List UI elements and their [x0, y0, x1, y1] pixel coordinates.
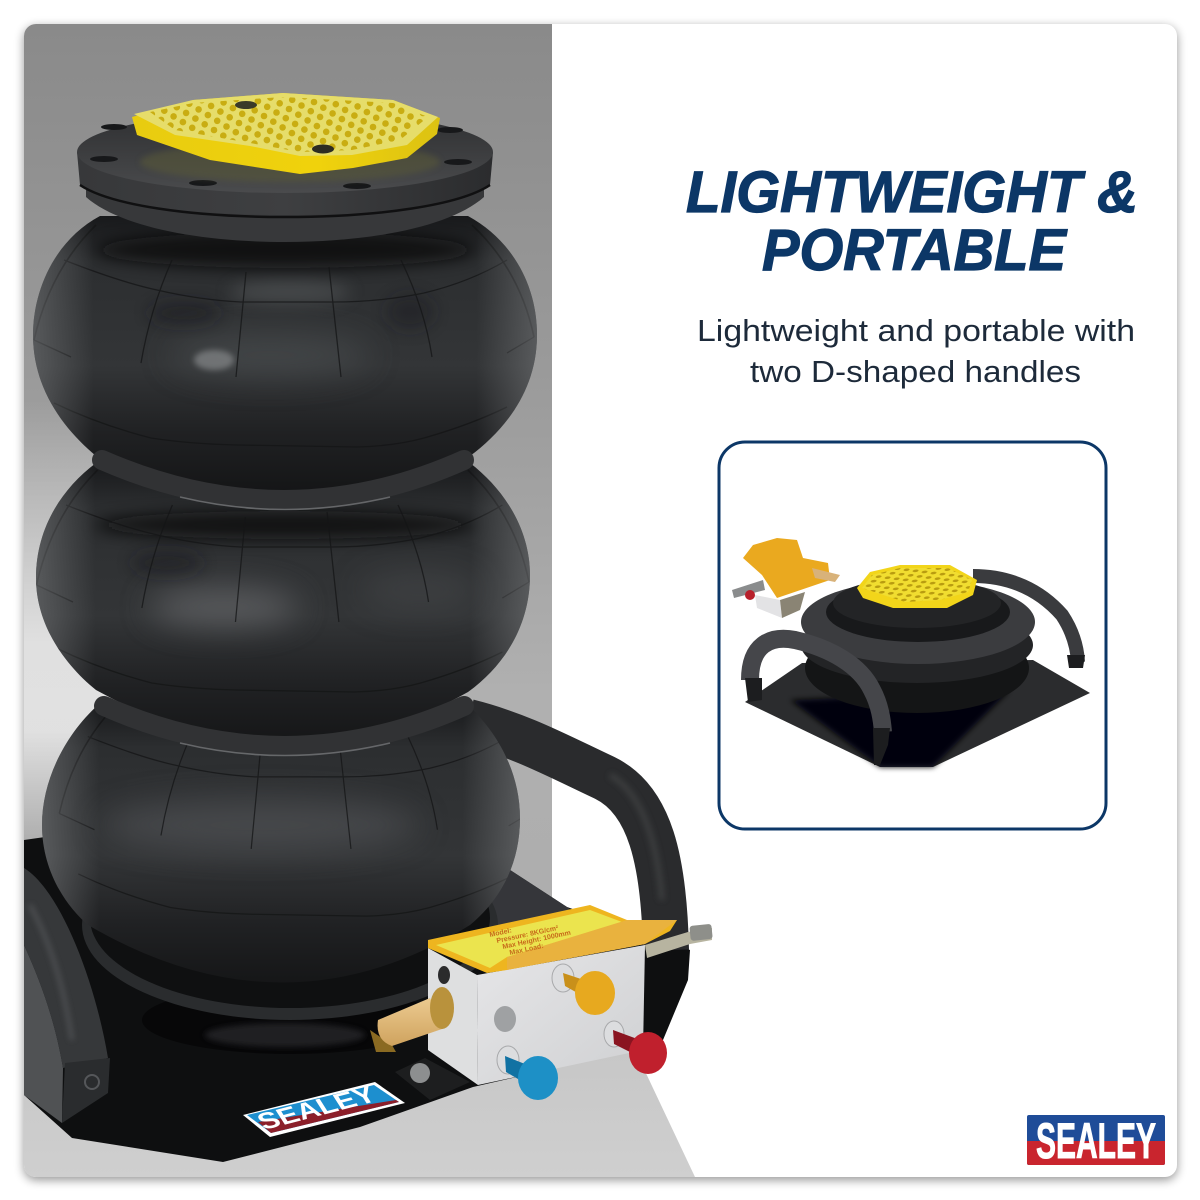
inset bellows: [801, 578, 1035, 713]
yellow pedal: [428, 905, 677, 973]
sealey sticker: [243, 1082, 405, 1137]
exhaust silencer: [370, 987, 454, 1052]
pad shadow: [142, 149, 438, 181]
left handle: [24, 868, 110, 1123]
gold knob: [552, 964, 615, 1015]
inset rear handle: [973, 576, 1078, 662]
yellow pedal: Pressure: 8KG/cm²: [496, 925, 560, 945]
inset photo panel: [719, 442, 1106, 829]
sealey logo: [1027, 1113, 1165, 1169]
yellow pedal: Max Load:: [509, 943, 544, 957]
heading: [686, 160, 1138, 283]
red knob: [604, 1021, 667, 1074]
description text: [697, 313, 1135, 389]
pedal label lines: Model:: [489, 927, 512, 939]
rear handle: [468, 722, 666, 950]
inset plate shade: [790, 690, 1010, 767]
pad studs: [150, 97, 425, 152]
bottom bellow: [42, 708, 520, 974]
foot valve: [370, 905, 713, 1100]
plate washer: [395, 1058, 470, 1100]
heading: PORTABLE: [762, 218, 1068, 283]
air connector: [645, 924, 713, 958]
top flange: [77, 111, 493, 242]
air jack product photo: [24, 39, 713, 1162]
middle bellow: [36, 465, 530, 736]
description text: two D-shaped handles: [750, 354, 1081, 389]
sticker wordmark: SEALEY: [252, 1082, 382, 1135]
plate far corner: [492, 870, 570, 925]
heading: LIGHTWEIGHT &: [686, 160, 1138, 225]
base plate: [24, 837, 690, 1162]
inset front handle: [750, 639, 883, 732]
screw: [494, 1006, 516, 1032]
grey photo backdrop: [24, 24, 695, 1177]
lower ring mount: [82, 903, 498, 1054]
lower waist ring: [104, 706, 464, 756]
rear handle highlight: [610, 775, 662, 900]
yellow lifting pad: [132, 93, 440, 174]
bracket bolt: [85, 1075, 99, 1089]
upper waist ring: [102, 460, 464, 510]
flange bolt holes: [90, 124, 472, 189]
top bellow: [30, 215, 540, 505]
inset handle clips: [745, 655, 1085, 765]
pad bolts: [235, 101, 257, 109]
inset valve: [732, 538, 840, 618]
yellow pedal: Max Height: 1000mm: [502, 930, 572, 951]
blue knob: [497, 1046, 558, 1100]
inset plate: [745, 660, 1090, 767]
inset yellow pad: [857, 565, 977, 608]
inset pad studs: [862, 568, 972, 602]
description text: Lightweight and portable with: [697, 313, 1135, 348]
valve block front face: [477, 945, 645, 1085]
side port: [438, 966, 450, 984]
handle bracket: [62, 1058, 110, 1123]
valve block left face: [428, 948, 478, 1085]
